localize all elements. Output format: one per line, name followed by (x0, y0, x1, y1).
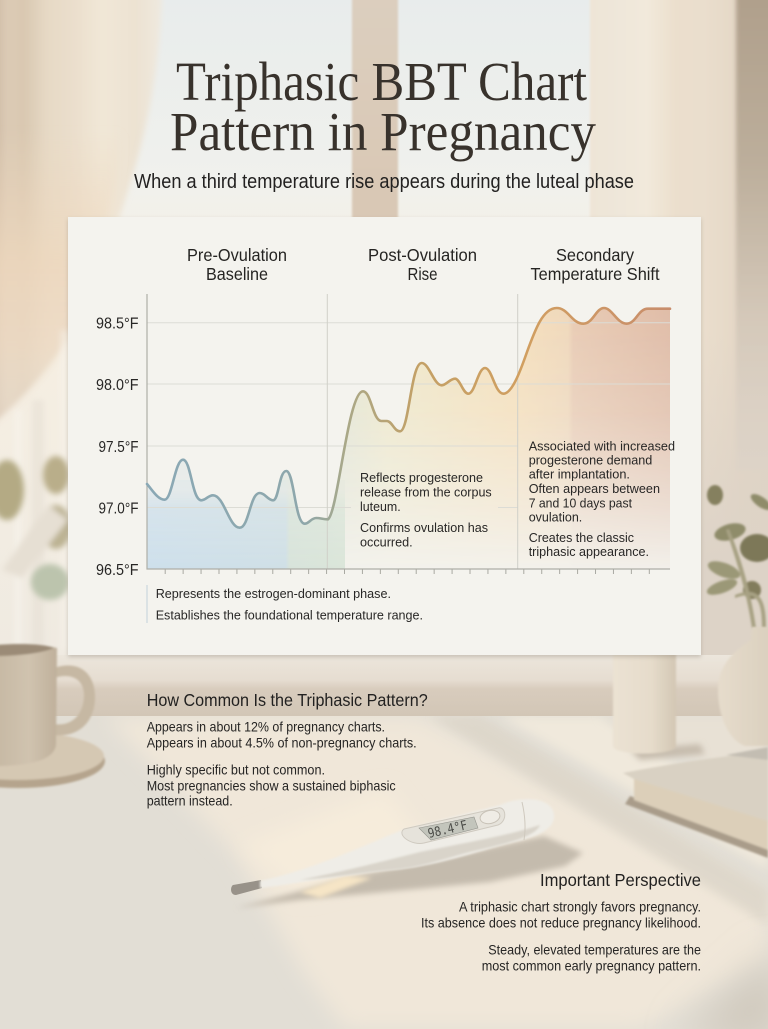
text block: how common is the triphasic pattern: Most pregnancies show a sustained biphasic (147, 777, 396, 793)
subtitle: When a third temperature rise appears during the luteal phase (134, 171, 634, 193)
y axis labels: 98.5°F (96, 316, 138, 332)
y axis labels (96, 316, 138, 579)
text block: how common is the triphasic pattern: Highly specific but not common. (147, 761, 325, 777)
icon: coffee mug on saucer (0, 644, 105, 788)
text block: post-ovulation notes: release from the corpus (360, 484, 492, 499)
text block: how common is the triphasic pattern: Appears in about 4.5% of non-pregnancy charts. (147, 735, 417, 751)
text block: post-ovulation notes: Confirms ovulation has (360, 520, 488, 535)
heading: pre-ovulation baseline: Baseline (206, 264, 268, 284)
text block: baseline notes (147, 585, 423, 623)
text block: important perspective: most common early pregnancy pattern. (482, 957, 701, 973)
text block: secondary shift notes: Creates the classic (529, 530, 634, 545)
icon: closed book (623, 747, 768, 858)
y axis labels: 97.5°F (98, 439, 138, 456)
title: Pattern in Pregnancy (170, 101, 596, 162)
text block: how common is the triphasic pattern: pattern instead. (147, 793, 233, 809)
icon: digital thermometer (231, 799, 583, 908)
text block: important perspective: Steady, elevated temperatures are the (488, 941, 701, 957)
heading: post-ovulation rise: Post-Ovulation (368, 245, 477, 265)
text block: how common is the triphasic pattern: Appears in about 12% of pregnancy charts. (147, 719, 385, 735)
text block: post-ovulation notes: luteum. (360, 499, 401, 514)
heading: post-ovulation rise (368, 245, 477, 284)
text block: secondary shift notes: Associated with increased (529, 438, 675, 453)
text block: important perspective: Its absence does not reduce pregnancy likelihood. (421, 915, 701, 931)
y axis labels: 98.0°F (96, 377, 138, 394)
icon: left blurred plant (0, 456, 71, 600)
text block: post-ovulation notes (360, 470, 492, 550)
text block: important perspective: Important Perspective (540, 870, 701, 890)
text block: secondary shift notes: triphasic appearance. (529, 544, 649, 559)
heading: secondary temperature shift: Temperature Shift (530, 264, 660, 284)
icon: digital thermometer: 98.4°F (427, 818, 469, 842)
heading: pre-ovulation baseline: Pre-Ovulation (187, 245, 287, 265)
text block: secondary shift notes: 7 and 10 days past (529, 495, 632, 510)
text block: secondary shift notes (529, 438, 675, 559)
line chart: basal body temperature (96, 290, 672, 579)
text block: secondary shift notes: after implantation. (529, 467, 630, 482)
title: Triphasic BBT Chart (176, 51, 587, 112)
text block: secondary shift notes: ovulation. (529, 509, 582, 524)
heading: secondary temperature shift (530, 245, 660, 284)
text block: post-ovulation notes: Reflects progesterone (360, 470, 483, 485)
text block: how common is the triphasic pattern (147, 690, 428, 809)
title (170, 51, 596, 162)
text block: important perspective: A triphasic chart strongly favors pregnancy. (459, 899, 701, 915)
temperature line (147, 308, 670, 528)
heading: pre-ovulation baseline (187, 245, 287, 284)
text block: important perspective (421, 870, 701, 973)
heading: post-ovulation rise: Rise (408, 264, 438, 284)
text block: how common is the triphasic pattern: How Common Is the Triphasic Pattern? (147, 690, 428, 710)
y axis labels: 97.0°F (98, 500, 138, 518)
icon: candle cylinder (613, 650, 705, 760)
chart area fill (147, 290, 672, 575)
icon: plant in vase (705, 485, 768, 746)
y axis labels: 96.5°F (96, 562, 138, 579)
text block: baseline notes: Represents the estrogen-dominant phase. (156, 586, 391, 601)
heading: secondary temperature shift: Secondary (556, 245, 634, 265)
text block: secondary shift notes: Often appears between (529, 481, 660, 496)
panel: chart card (68, 217, 701, 657)
text block: baseline notes: Establishes the foundational temperature range. (156, 608, 423, 623)
text block: secondary shift notes: progesterone demand (529, 453, 652, 468)
text block: post-ovulation notes: occurred. (360, 534, 413, 550)
